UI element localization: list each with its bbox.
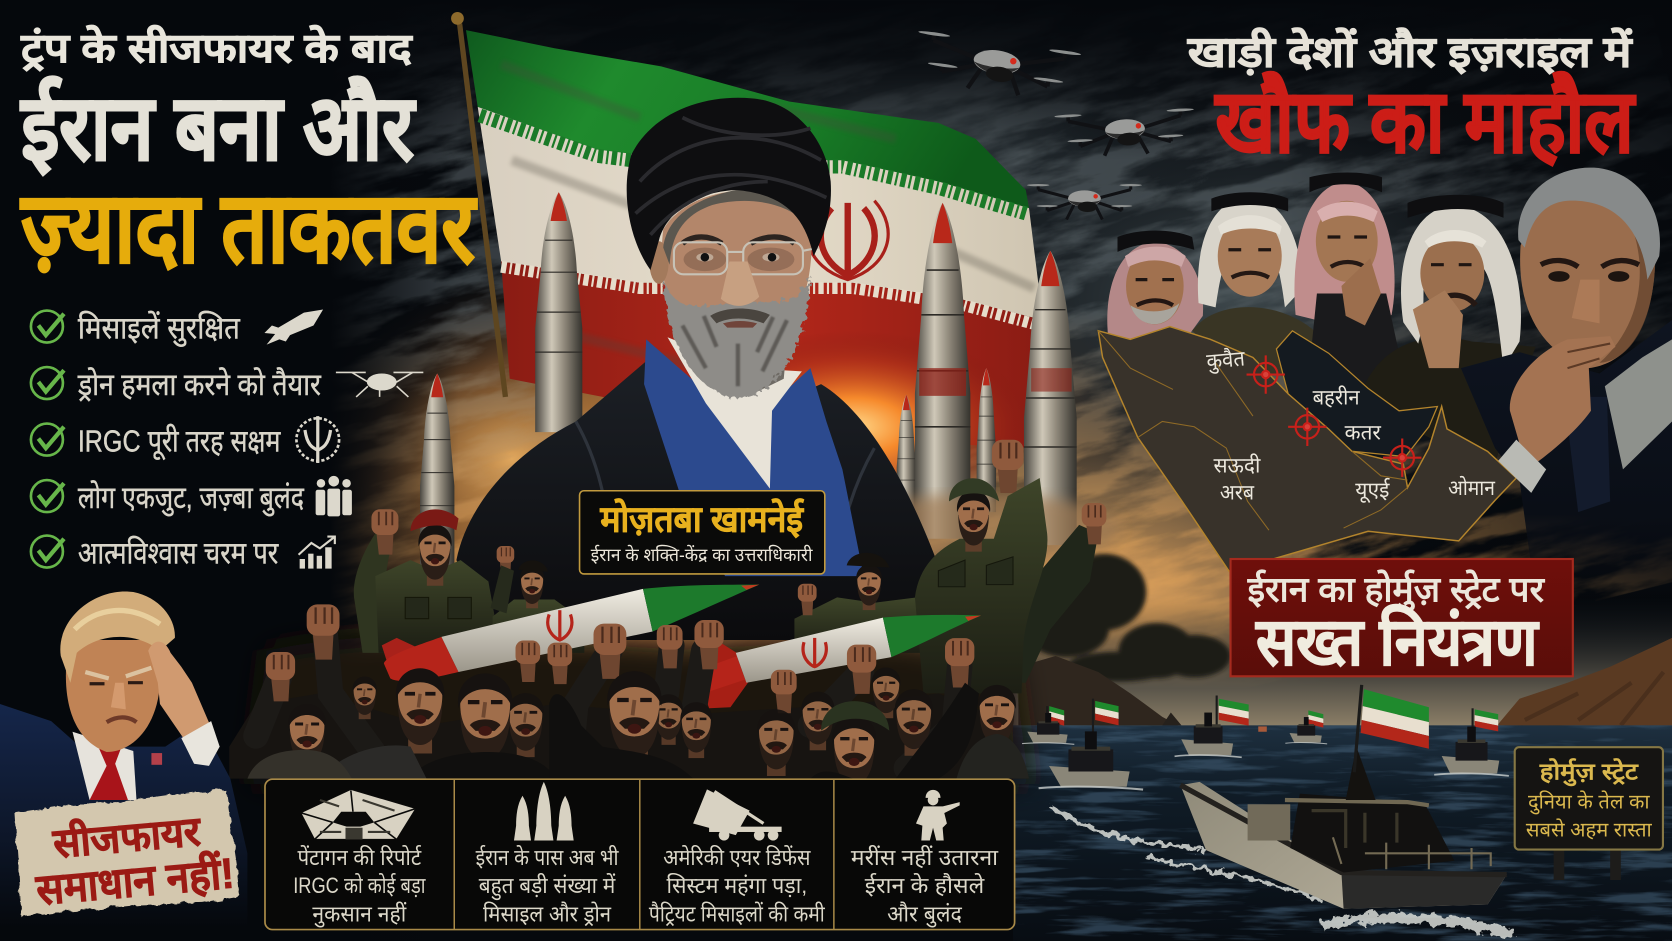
shirt	[1605, 339, 1672, 469]
leader 2	[1192, 192, 1317, 384]
Gulf map	[1098, 327, 1516, 572]
robe	[456, 357, 938, 640]
torn paper note	[15, 790, 240, 917]
panel 4: marines: मरींस नहीं उतारना	[851, 844, 999, 870]
title right	[1187, 27, 1636, 171]
item 1: मिसाइलें सुरक्षित	[78, 310, 241, 347]
panel 2: missiles and drones	[476, 782, 620, 927]
headline line 1: ट्रंप के सीजफायर के बाद	[20, 25, 413, 72]
icon: soldier silhouette	[916, 790, 960, 841]
icon: pentagon	[301, 789, 416, 839]
hull	[1180, 782, 1507, 909]
headline left	[20, 25, 478, 283]
sign posts	[1559, 848, 1615, 880]
map labels: कुवैत	[1205, 345, 1247, 375]
sign line 1: होर्मुज़ स्ट्रेट	[1539, 758, 1639, 787]
panel 4: marines	[851, 790, 999, 928]
target: Kuwait	[1247, 355, 1285, 394]
buoy boat	[1258, 726, 1267, 732]
panel 1: Pentagon report	[293, 789, 426, 928]
note line 1: सीजफायर	[50, 808, 203, 867]
headline line 2: ईरान बना और	[20, 76, 416, 179]
gulf water	[1276, 331, 1437, 457]
Mojtaba Khamenei portrait	[456, 98, 938, 640]
panel 3: air defense cost: सिस्टम महंगा पड़ा,	[666, 872, 807, 898]
panel 2: missiles and drones: बहुत बड़ी संख्या में	[479, 872, 616, 901]
features	[85, 668, 151, 678]
soldier: red beret left	[354, 509, 501, 653]
blue qaba	[644, 339, 864, 576]
cabin	[1290, 794, 1454, 873]
hair	[663, 189, 810, 265]
title line 1: खाड़ी देशों और इज़राइल में	[1187, 27, 1633, 76]
soldier: small left	[491, 546, 584, 653]
crowd backdrop	[251, 633, 1029, 784]
sign line 2: दुनिया के तेल का	[1528, 790, 1650, 815]
soldier: green cap with raised arm	[915, 440, 1047, 693]
name text: मोज़तबा खामनेई	[599, 497, 805, 539]
map labels: बहरीन	[1313, 384, 1361, 409]
patrol boat foreground	[1051, 685, 1514, 934]
cuff	[1498, 440, 1546, 493]
small boats	[1022, 695, 1509, 790]
flag emblem	[807, 201, 888, 280]
leader 3	[1294, 172, 1402, 411]
flagpole	[451, 12, 505, 397]
mountain right	[1497, 638, 1672, 727]
subtitle text: ईरान के शक्ति-केंद्र का उत्तराधिकारी	[591, 544, 813, 565]
clouds near horizon	[1024, 554, 1231, 682]
neck	[693, 320, 789, 397]
boat 3	[1175, 695, 1249, 757]
panel 1: Pentagon report: नुकसान नहीं	[312, 901, 407, 928]
icon: three missiles	[514, 782, 574, 841]
map labels: अरब	[1220, 480, 1255, 504]
panel 3: air defense cost	[649, 789, 826, 927]
target: Bahrain	[1288, 408, 1327, 446]
white collar	[668, 337, 802, 489]
hand on mouth	[1510, 336, 1615, 469]
panel 2: missiles and drones: ईरान के पास अब भी	[476, 844, 620, 870]
drones	[912, 30, 1196, 219]
crowd of protesters	[229, 604, 1029, 793]
panel 1: Pentagon report: IRGC को कोई बड़ा	[293, 872, 426, 898]
fire burst	[672, 331, 1034, 523]
front row faces	[288, 668, 1016, 793]
item 4: लोग एकजुट, जज़्बा बुलंद	[78, 480, 304, 517]
horizon sky	[1013, 597, 1672, 727]
face	[66, 640, 160, 752]
map labels: यूएई	[1355, 477, 1390, 503]
Netanyahu	[1461, 168, 1672, 597]
gulf leaders	[1107, 172, 1536, 469]
raised arms	[256, 635, 960, 768]
item 3	[31, 416, 339, 463]
background: stormy sunset sky	[338, 42, 1672, 742]
hair	[60, 591, 175, 683]
panel 4: marines: और बुलंद	[887, 901, 963, 928]
headline line 3: ज़्यादा ताकतवर	[20, 173, 478, 283]
note line 2: समाधान नहीं!	[33, 848, 236, 915]
map labels: ओमान	[1448, 475, 1496, 500]
Hormuz sign	[1515, 747, 1663, 880]
boat 4	[1285, 710, 1327, 744]
beard	[663, 275, 810, 398]
boat 2	[1039, 699, 1143, 790]
map labels: कतर	[1345, 421, 1382, 445]
tie	[90, 747, 128, 800]
name label	[580, 491, 825, 574]
boat 5	[1434, 708, 1509, 776]
bottom info panel	[265, 779, 1015, 930]
hair	[1518, 168, 1660, 280]
banner line 1: ईरान का होर्मुज़ स्ट्रेट पर	[1247, 569, 1546, 612]
hand on forehead	[148, 642, 211, 738]
boat 1	[1022, 706, 1074, 744]
tie	[1564, 397, 1610, 512]
cuff	[181, 721, 220, 766]
panel 4: marines: ईरान के हौसले	[865, 872, 985, 898]
missiles	[420, 192, 1120, 572]
deck block	[1248, 804, 1290, 841]
suit	[1461, 320, 1672, 597]
soldier: far right arm	[1008, 503, 1106, 683]
Trump figure	[0, 591, 247, 928]
item 2: ड्रोन हमला करने को तैयार	[77, 367, 322, 402]
leader 1	[1107, 231, 1203, 363]
sea	[1013, 725, 1672, 941]
front row bodies	[247, 683, 1029, 779]
item 3: IRGC पूरी तरह सक्षम	[78, 423, 281, 460]
map labels	[1205, 345, 1496, 504]
wake	[1051, 807, 1514, 934]
crowd body mass	[229, 693, 1029, 779]
lapel pin	[151, 753, 162, 765]
sign line 3: सबसे अहम रास्ता	[1526, 817, 1652, 841]
face	[662, 190, 812, 368]
map labels: सऊदी	[1213, 453, 1261, 478]
head	[1520, 182, 1655, 368]
back row faces	[353, 668, 933, 776]
target: UAE	[1383, 439, 1421, 477]
panel 3: air defense cost: अमेरिकी एयर डिफेंस	[663, 844, 811, 870]
ear	[649, 241, 669, 284]
item 5: आत्मविश्वास चरम पर	[78, 535, 279, 570]
item 1	[31, 309, 323, 347]
Iranian flag	[466, 30, 1043, 448]
eyebrows and glasses	[682, 237, 794, 243]
panel 3: air defense cost: पैट्रियट मिसाइलों की कमी	[649, 901, 826, 927]
shirt	[73, 732, 136, 800]
soldiers behind rockets	[354, 440, 1106, 693]
railings	[1333, 837, 1491, 869]
land	[1098, 327, 1516, 572]
suit	[0, 704, 247, 928]
banner line 2: सख्त नियंत्रण	[1254, 604, 1540, 680]
mountain left	[1018, 656, 1178, 725]
rocket 2	[691, 615, 981, 708]
main boat flag	[1361, 689, 1429, 749]
checklist	[31, 309, 423, 570]
panel 1: Pentagon report: पेंटागन की रिपोर्ट	[298, 844, 422, 870]
panel 2: missiles and drones: मिसाइल और ड्रोन	[483, 901, 612, 927]
turban	[627, 98, 831, 270]
mast	[1346, 747, 1376, 800]
leader 4	[1365, 195, 1536, 469]
rocket 1	[382, 585, 759, 681]
soldier: small right	[794, 553, 933, 653]
icon: air defense launcher	[693, 789, 782, 841]
Hormuz control banner	[1231, 559, 1573, 680]
